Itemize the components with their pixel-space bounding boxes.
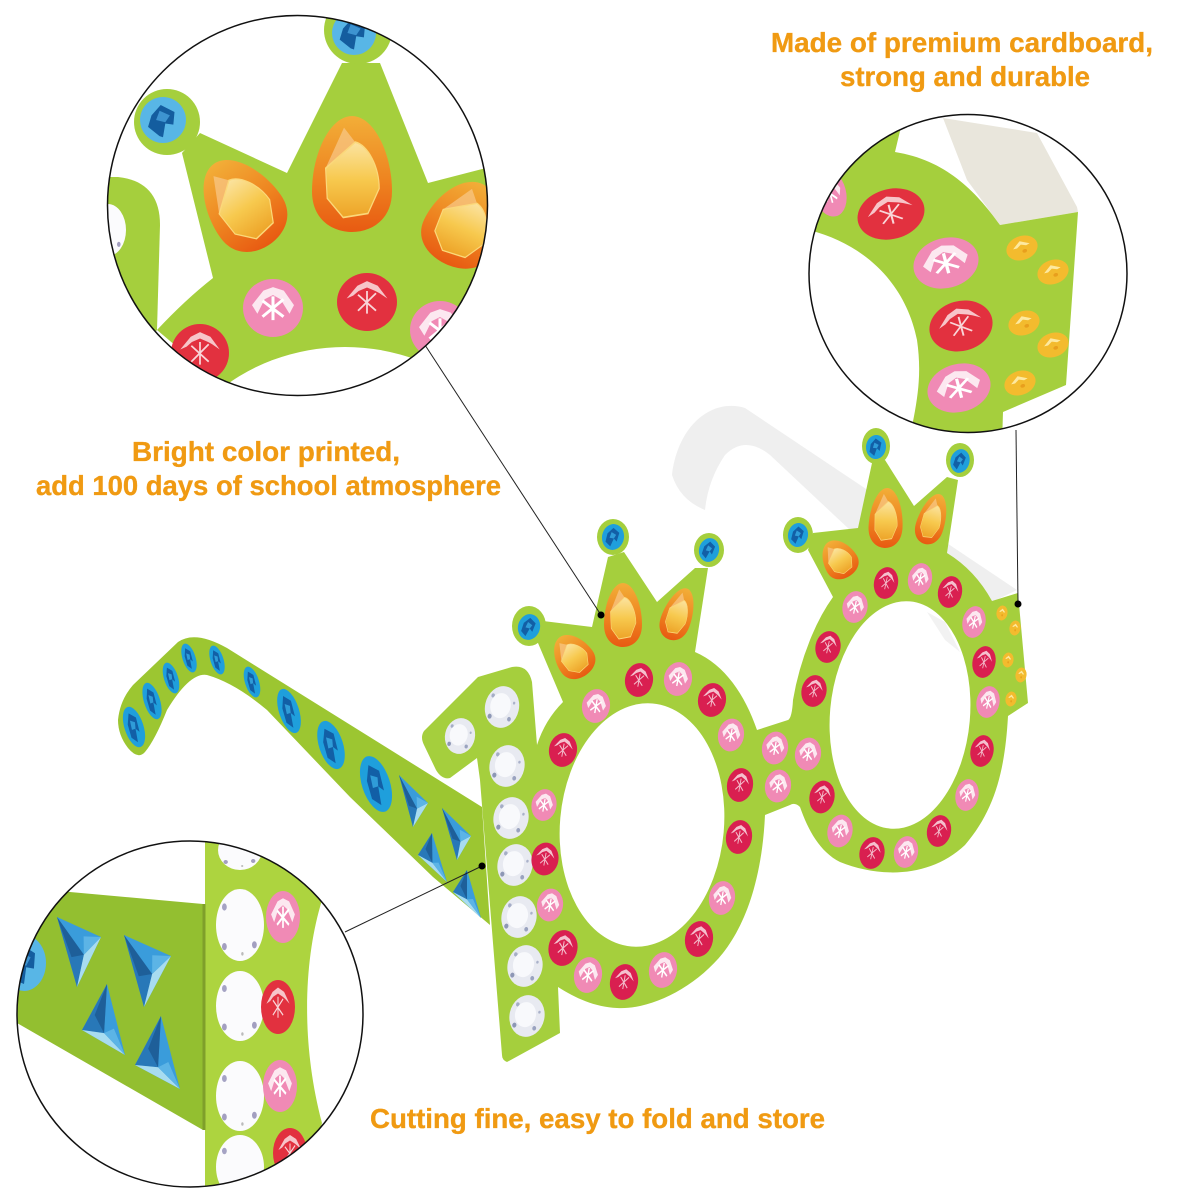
inset circle: crown detail	[106, 14, 488, 396]
leader line: bottom-left callout	[345, 862, 486, 932]
gems on bridge and second zero	[759, 561, 1028, 871]
pale far temple arm	[672, 406, 1017, 602]
caption: durable material	[771, 27, 1153, 92]
gems on first zero	[529, 660, 756, 1002]
crown gems	[515, 434, 972, 686]
near temple arm	[118, 637, 490, 940]
party glasses	[118, 428, 1028, 1062]
caption: bright colour: add 100 days of school atmosphere	[36, 470, 501, 501]
inset circle: temple hinge detail	[800, 110, 1127, 445]
caption: durable material: Made of premium cardboard,	[771, 27, 1153, 58]
caption: bright colour: Bright color printed,	[132, 436, 400, 467]
caption: durable material: strong and durable	[840, 61, 1090, 92]
leader line: top-right callout	[1014, 430, 1022, 608]
caption: cutting and folding: Cutting fine, easy to fold and store	[370, 1103, 825, 1134]
leader line: top-left callout	[425, 345, 604, 618]
diamond column of the numeral 1	[442, 683, 548, 1040]
lens openings	[550, 595, 980, 954]
inset circle: fold detail	[0, 830, 363, 1200]
caption: bright colour	[36, 436, 501, 501]
glasses front frame	[422, 428, 1028, 1062]
